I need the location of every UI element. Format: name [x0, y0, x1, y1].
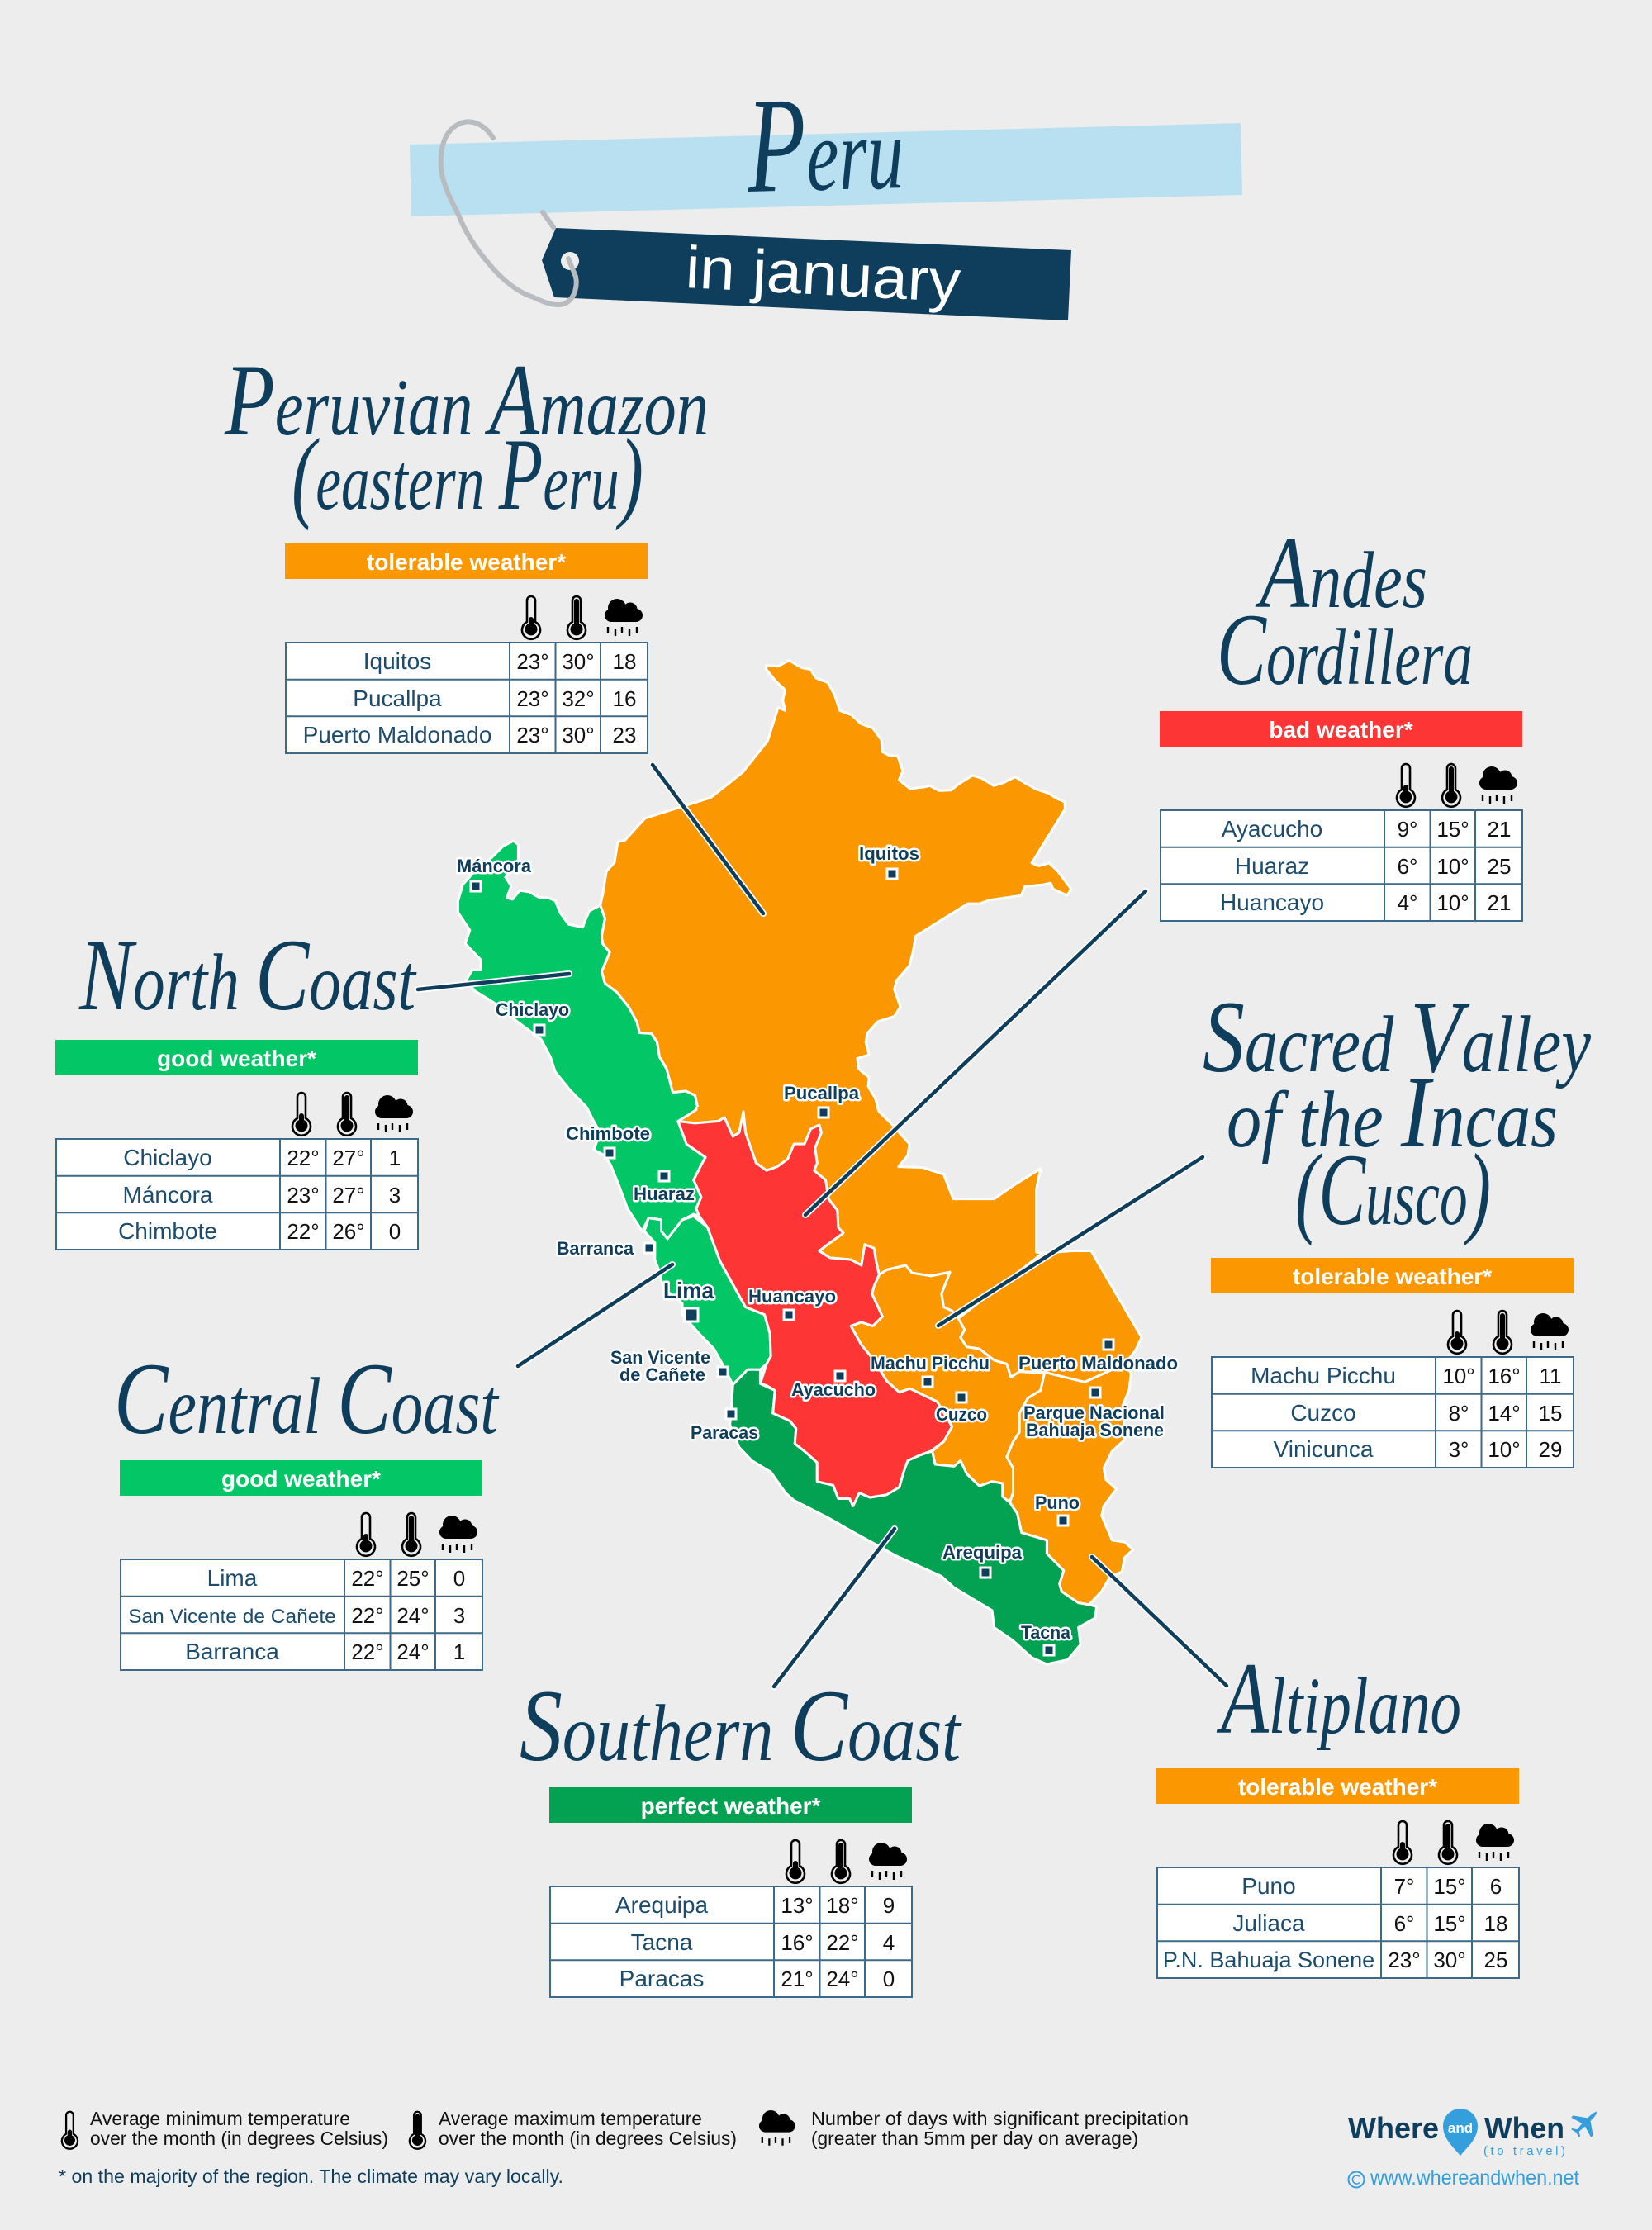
region: Andes Cordillera — [678, 1112, 952, 1506]
table: Central Coast: San Vicente de Cañete — [128, 1606, 336, 1628]
subtitle tag shape — [542, 228, 1071, 320]
table: Southern Coast: 0 — [883, 1967, 895, 1991]
city: Máncora — [457, 856, 532, 891]
table: Southern Coast: 18° — [826, 1893, 859, 1918]
city: Chiclayo — [496, 999, 569, 1035]
table: Sacred Valley: 10° — [1442, 1364, 1475, 1388]
banner: perfect weather — [549, 1787, 912, 1823]
region: Altiplano north — [958, 1251, 1142, 1382]
table: Altiplano: 23° — [1388, 1948, 1421, 1972]
tag string — [441, 121, 577, 305]
city: Parque Nacional Bahuaja Sonene: Parque Nacional — [1023, 1402, 1165, 1423]
table: Central Coast: 1 — [453, 1639, 465, 1664]
heading: Peruvian Amazon — [224, 344, 709, 531]
icon: copyright — [1348, 2172, 1365, 2187]
panel: Southern Coast — [520, 1669, 962, 1997]
region: North Coast — [458, 841, 707, 1239]
table: Altiplano: 15° — [1433, 1911, 1466, 1936]
table: Sacred Valley: 15 — [1539, 1401, 1562, 1426]
table: Central Coast: Lima — [207, 1565, 258, 1591]
heading: Sacred Valley of the Incas (Cusco): (Cusco) — [1295, 1133, 1491, 1246]
table: North Coast: 23° — [287, 1183, 320, 1208]
icons: temperature and rain — [292, 1093, 413, 1136]
legend text: minimum temperature: over the month (in degrees Celsius) — [90, 2128, 388, 2149]
table: Andes Cordillera: 10° — [1436, 854, 1469, 879]
table: Southern Coast: 24° — [826, 1967, 859, 1991]
region: Altiplano south — [1007, 1364, 1133, 1605]
table: Andes Cordillera: 21 — [1488, 890, 1511, 915]
panel: Central Coast — [114, 1342, 500, 1670]
city: Tacna — [1021, 1622, 1071, 1655]
table: Peruvian Amazon: 18 — [613, 649, 636, 674]
city: Máncora: Máncora — [457, 856, 532, 876]
table: Central Coast: 24° — [396, 1603, 430, 1628]
heading: Sacred Valley of the Incas (Cusco): of the Incas — [1227, 1056, 1558, 1169]
legend text: precipitation: (greater than 5mm per day on average) — [811, 2128, 1138, 2149]
city labels and markers — [457, 843, 1178, 1655]
city: Barranca: Barranca — [557, 1238, 634, 1259]
heading: Peruvian Amazon: Peruvian Amazon — [224, 344, 709, 457]
table: Sacred Valley: 29 — [1539, 1437, 1562, 1462]
table: North Coast — [56, 1139, 418, 1250]
banner: perfect weather: perfect weather* — [641, 1793, 821, 1819]
legend — [59, 2108, 1189, 2187]
table: Central Coast: 22° — [351, 1603, 384, 1628]
title: light blue banner — [410, 123, 1242, 216]
subtitle: in january: in january — [684, 235, 962, 315]
legend text: precipitation — [811, 2108, 1189, 2149]
table: Central Coast: Barranca — [185, 1639, 279, 1664]
table: Peruvian Amazon: 30° — [562, 723, 595, 747]
table: Central Coast: 24° — [396, 1639, 430, 1664]
table: Peruvian Amazon — [286, 643, 648, 753]
banner: tolerable weather — [1156, 1768, 1519, 1804]
panel: North Coast — [55, 918, 418, 1250]
heading: Peruvian Amazon: (eastern Peru) — [292, 418, 643, 531]
icons: temperature and rain — [1393, 1821, 1514, 1864]
table: Central Coast: 22° — [351, 1566, 384, 1591]
city: Huancayo: Huancayo — [748, 1286, 836, 1307]
banner: tolerable weather: tolerable weather* — [367, 549, 566, 575]
city: Cuzco — [936, 1393, 987, 1425]
map of Peru — [458, 661, 1142, 1664]
table: Sacred Valley: Cuzco — [1290, 1400, 1356, 1426]
logo wordmark right: When — [1484, 2111, 1564, 2145]
table: Altiplano: 18 — [1484, 1911, 1507, 1936]
table: Peruvian Amazon: 23° — [516, 723, 549, 747]
logo tagline: (to travel) — [1483, 2144, 1565, 2158]
table: North Coast: Chiclayo — [123, 1145, 212, 1170]
banner: tolerable weather — [285, 543, 648, 579]
table: Southern Coast — [550, 1886, 912, 1997]
icon: maximum temperature — [410, 2112, 425, 2149]
logo pin: and — [1448, 2120, 1473, 2136]
city: Arequipa — [942, 1542, 1023, 1578]
city: Chimbote: Chimbote — [566, 1123, 650, 1144]
region: Peruvian Amazon — [601, 661, 1071, 1318]
icons: temperature and rain — [522, 596, 643, 639]
heading: Central Coast: Central Coast — [114, 1342, 500, 1455]
table: Southern Coast: 22° — [826, 1930, 859, 1955]
table: Southern Coast: 21° — [781, 1967, 814, 1991]
table: North Coast: 27° — [332, 1146, 365, 1170]
table: Peruvian Amazon: Pucallpa — [353, 686, 442, 711]
table: North Coast: 1 — [389, 1146, 401, 1170]
table: Central Coast: 25° — [396, 1566, 430, 1591]
table: Sacred Valley: 11 — [1540, 1364, 1561, 1388]
banner: bad weather — [1160, 711, 1522, 747]
city: San Vicente de Cañete: de Cañete — [620, 1364, 705, 1385]
banner: good weather: good weather* — [157, 1046, 316, 1071]
table: Altiplano: 6° — [1394, 1911, 1414, 1936]
table: Altiplano: 30° — [1433, 1948, 1466, 1972]
table: Altiplano: 7° — [1394, 1874, 1414, 1899]
icons: temperature and rain — [786, 1840, 907, 1883]
table: Andes Cordillera: Huaraz — [1235, 853, 1309, 879]
city: Pucallpa — [784, 1083, 860, 1117]
table: Andes Cordillera: Huancayo — [1220, 890, 1324, 915]
city: Lima — [663, 1278, 714, 1321]
table: Peruvian Amazon: 30° — [562, 649, 595, 674]
table: Peruvian Amazon: Iquitos — [363, 648, 431, 674]
table: Andes Cordillera: 6° — [1398, 854, 1417, 879]
table: Sacred Valley: 8° — [1449, 1401, 1469, 1426]
region: Sacred Valley — [851, 1265, 1045, 1502]
legend text: precipitation: Number of days with significant precipitation — [811, 2108, 1189, 2129]
legend text: maximum temperature: Average maximum temperature — [439, 2108, 702, 2129]
city: Paracas — [691, 1409, 758, 1443]
table: Sacred Valley — [1212, 1357, 1574, 1468]
city: Puerto Maldonado: Puerto Maldonado — [1018, 1353, 1178, 1374]
table: North Coast: 22° — [287, 1219, 320, 1244]
city: Arequipa: Arequipa — [942, 1542, 1023, 1563]
table: Andes Cordillera: Ayacucho — [1222, 816, 1322, 842]
table: Andes Cordillera: 10° — [1436, 890, 1469, 915]
table: Sacred Valley: 10° — [1488, 1437, 1521, 1462]
city: Huaraz: Huaraz — [634, 1184, 695, 1204]
icon: precipitation — [759, 2110, 795, 2146]
logo wordmark left: Where — [1348, 2111, 1439, 2145]
heading: Andes Cordillera — [1217, 516, 1473, 706]
table: Sacred Valley: 16° — [1488, 1364, 1521, 1388]
banner: tolerable weather: tolerable weather* — [1238, 1774, 1437, 1800]
table: Central Coast: 0 — [453, 1566, 465, 1591]
banner: bad weather: bad weather* — [1269, 717, 1413, 743]
table: Southern Coast: Paracas — [620, 1966, 704, 1991]
table: Southern Coast: Arequipa — [615, 1892, 708, 1918]
table: Central Coast: 3 — [453, 1603, 465, 1628]
icons: temperature and rain — [357, 1513, 477, 1556]
table: Altiplano: P.N. Bahuaja Sonene — [1163, 1948, 1374, 1972]
icon: plane — [1565, 2102, 1607, 2143]
banner: good weather — [55, 1040, 418, 1075]
icon: minimum temperature — [62, 2112, 78, 2149]
table: Peruvian Amazon: 16 — [613, 686, 636, 711]
banner: tolerable weather: tolerable weather* — [1293, 1264, 1492, 1289]
city: Huancayo — [748, 1286, 836, 1320]
logo pin — [1443, 2109, 1478, 2156]
table: North Coast: 27° — [332, 1183, 365, 1208]
table: Peruvian Amazon: 23° — [516, 686, 549, 711]
city: Puno: Puno — [1035, 1492, 1080, 1513]
banner: good weather — [120, 1460, 482, 1496]
city: Ayacucho: Ayacucho — [791, 1379, 876, 1400]
table: Peruvian Amazon: 32° — [562, 686, 595, 711]
banner: good weather: good weather* — [221, 1466, 381, 1492]
heading: Sacred Valley of the Incas (Cusco) — [1203, 980, 1591, 1246]
title: Peru: Peru — [744, 66, 905, 221]
logo: Where and When — [1348, 2102, 1607, 2190]
table: Sacred Valley: Machu Picchu — [1251, 1363, 1396, 1388]
city: Chimbote — [566, 1123, 650, 1158]
table: North Coast: 0 — [389, 1219, 401, 1244]
panel: Andes Cordillera — [1160, 516, 1522, 921]
table: Southern Coast: 4 — [883, 1930, 895, 1955]
table: Altiplano — [1157, 1867, 1519, 1978]
table: Andes Cordillera: 25 — [1488, 854, 1511, 879]
table: Central Coast: 22° — [351, 1639, 384, 1664]
table: Central Coast — [121, 1559, 482, 1670]
city: Iquitos — [859, 843, 919, 879]
city: Parque Nacional Bahuaja Sonene: Bahuaja Sonene — [1026, 1420, 1164, 1440]
city: Parque Nacional Bahuaja Sonene — [1023, 1388, 1165, 1440]
city: Iquitos: Iquitos — [859, 843, 919, 864]
table: Peruvian Amazon: Puerto Maldonado — [303, 722, 491, 747]
city: Machu Picchu: Machu Picchu — [871, 1353, 990, 1374]
table: Andes Cordillera: 15° — [1436, 817, 1469, 842]
table: North Coast: Máncora — [123, 1182, 213, 1208]
heading: Andes Cordillera: Andes — [1255, 516, 1427, 629]
table: Sacred Valley: Vinicunca — [1274, 1436, 1374, 1462]
table: Andes Cordillera — [1161, 810, 1522, 921]
city: Paracas: Paracas — [691, 1422, 758, 1443]
website url: www.whereandwhen.net — [1370, 2166, 1579, 2190]
city: Lima: Lima — [663, 1278, 714, 1303]
table: Peruvian Amazon: 23° — [516, 649, 549, 674]
table: Altiplano: 6 — [1490, 1874, 1502, 1899]
icons: temperature and rain — [1397, 764, 1517, 807]
legend text: minimum temperature — [90, 2108, 388, 2149]
icons: temperature and rain — [1448, 1311, 1569, 1354]
city: Chiclayo: Chiclayo — [496, 999, 569, 1020]
table: Altiplano: Juliaca — [1232, 1910, 1305, 1936]
city: Puno — [1035, 1492, 1080, 1525]
leader lines — [418, 765, 1227, 1687]
city: Tacna: Tacna — [1021, 1622, 1071, 1643]
city: Puerto Maldonado — [1018, 1340, 1178, 1374]
heading: Sacred Valley of the Incas (Cusco): Sacred Valley — [1203, 980, 1591, 1094]
table: Andes Cordillera: 9° — [1398, 817, 1417, 842]
city: Cuzco: Cuzco — [936, 1404, 987, 1425]
table: Southern Coast: 9 — [883, 1893, 895, 1918]
panel: Peruvian Amazon — [224, 344, 709, 753]
heading: Southern Coast: Southern Coast — [520, 1669, 962, 1782]
heading: Altiplano: Altiplano — [1217, 1642, 1461, 1755]
legend text: maximum temperature — [439, 2108, 737, 2149]
table: North Coast: 26° — [332, 1219, 365, 1244]
region: Central Coast — [644, 1216, 771, 1385]
table: Altiplano: 25 — [1484, 1948, 1507, 1972]
table: Altiplano: 15° — [1433, 1874, 1466, 1899]
panel: Altiplano — [1156, 1642, 1519, 1978]
banner: tolerable weather — [1211, 1258, 1574, 1293]
city: Huaraz — [634, 1171, 695, 1204]
table: North Coast: 22° — [287, 1146, 320, 1170]
heading: Andes Cordillera: Cordillera — [1217, 593, 1473, 706]
table: Sacred Valley: 3° — [1449, 1437, 1469, 1462]
table: Andes Cordillera: 4° — [1398, 890, 1417, 915]
legend text: maximum temperature: over the month (in degrees Celsius) — [439, 2128, 737, 2149]
city: San Vicente de Cañete — [610, 1347, 728, 1385]
table: Southern Coast: Tacna — [631, 1929, 693, 1955]
table: North Coast: Chimbote — [118, 1218, 217, 1244]
table: Southern Coast: 13° — [781, 1893, 814, 1918]
heading: North Coast: North Coast — [78, 918, 417, 1032]
footnote: * on the majority of the region. The climate may vary locally. — [59, 2166, 563, 2187]
table: North Coast: 3 — [389, 1183, 401, 1208]
table: Peruvian Amazon: 23 — [613, 723, 636, 747]
city: Pucallpa: Pucallpa — [784, 1083, 860, 1103]
table: Southern Coast: 16° — [781, 1930, 814, 1955]
table: Altiplano: Puno — [1241, 1873, 1296, 1899]
city: Machu Picchu — [871, 1353, 990, 1387]
region: Southern Coast — [730, 1369, 1097, 1664]
table: Andes Cordillera: 21 — [1488, 817, 1511, 842]
city: San Vicente de Cañete: San Vicente — [610, 1347, 710, 1368]
legend text: minimum temperature: Average minimum temperature — [90, 2108, 350, 2129]
table: Sacred Valley: 14° — [1488, 1401, 1521, 1426]
panel: Sacred Valley of the Incas — [1203, 980, 1591, 1468]
